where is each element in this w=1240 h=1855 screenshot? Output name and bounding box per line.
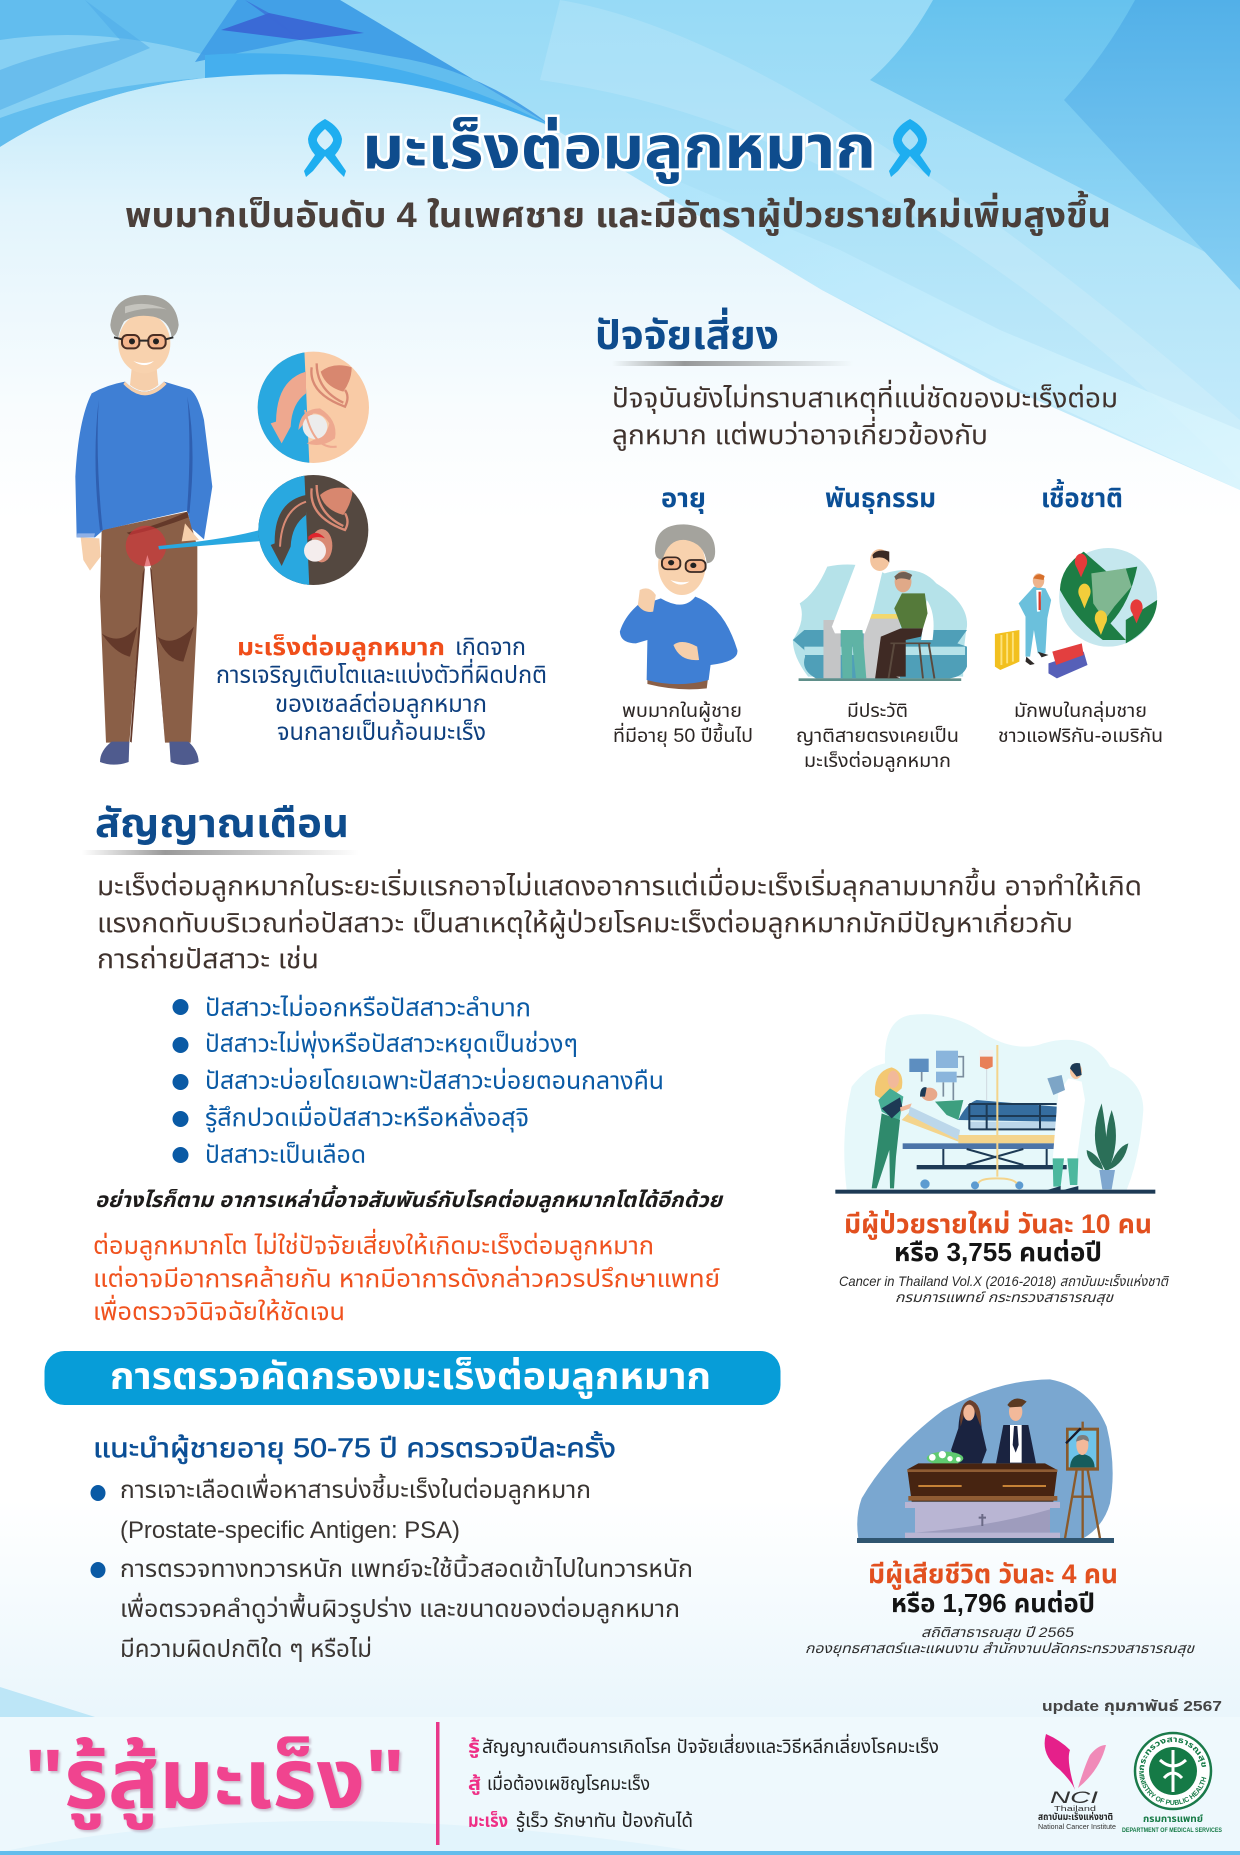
factor captions: มะเร็งต่อมลูกหมาก bbox=[804, 749, 951, 773]
illustration: man with anatomy circles bbox=[75, 295, 370, 765]
anatomy circle: cancer bbox=[257, 473, 370, 587]
footer divider bbox=[436, 1722, 440, 1845]
intro text: ปัจจุบันยังไม่ทราบสาเหตุที่แน่ชัดของมะเร็งต่อม bbox=[612, 379, 1118, 414]
panel: risk factors bbox=[595, 307, 1163, 773]
screening header pill: การตรวจคัดกรองมะเร็งต่อมลูกหมาก bbox=[110, 1356, 711, 1399]
pedestal bbox=[905, 1502, 1060, 1538]
main title: มะเร็งต่อมลูกหมาก bbox=[362, 114, 876, 184]
warning text: แต่อาจมีอาการคล้ายกัน หากมีอาการดังกล่าวควรปรึกษาแพทย์ bbox=[93, 1265, 720, 1293]
heading: risk factors: ปัจจัยเสี่ยง bbox=[595, 307, 779, 358]
symptom list bbox=[172, 994, 664, 1169]
icon: right blue ribbon bbox=[889, 119, 931, 177]
stat: new cases: กรมการแพทย์ กระทรวงสาธารณสุข bbox=[895, 1289, 1114, 1306]
factor headings: เชื้อชาติ bbox=[1041, 479, 1123, 513]
icon: globe and travel bbox=[995, 548, 1157, 678]
update date: update กุมภาพันธ์ 2567 bbox=[1042, 1698, 1222, 1715]
factor captions: พบมากในผู้ชาย bbox=[622, 699, 742, 723]
man bbox=[996, 1399, 1036, 1463]
stat: new cases: หรือ 3,755 คนต่อปี bbox=[894, 1237, 1102, 1267]
icon: older man bbox=[620, 524, 737, 689]
portrait bbox=[1065, 1422, 1100, 1538]
symptom list: ปัสสาวะบ่อยโดยเฉพาะปัสสาวะบ่อยตอนกลางคืน bbox=[205, 1067, 664, 1095]
screening list bbox=[90, 1473, 693, 1663]
symptom list: ปัสสาวะไม่พุ่งหรือปัสสาวะหยุดเป็นช่วงๆ bbox=[205, 1030, 578, 1059]
symptom list: ปัสสาวะเป็นเลือด bbox=[205, 1141, 366, 1169]
note: อย่างไรก็ตาม อาการเหล่านี้อาจสัมพันธ์กับโรคต่อมลูกหมากโตได้อีกด้วย bbox=[95, 1185, 724, 1213]
stat: deaths: สถิติสาธารณสุข ปี 2565 bbox=[921, 1624, 1074, 1641]
title bbox=[125, 114, 1111, 236]
factor headings: อายุ bbox=[661, 483, 706, 514]
logo: National Cancer Institute: NCI bbox=[1050, 1788, 1098, 1807]
doctor bbox=[1047, 1063, 1085, 1190]
plant bbox=[1087, 1103, 1128, 1189]
logo: Department of Medical Services: DEPARTMENT OF MEDICAL SERVICES bbox=[1122, 1827, 1223, 1834]
stat: deaths: มีผู้เสียชีวิต วันละ 4 คน bbox=[868, 1559, 1118, 1590]
factor headings bbox=[661, 479, 1123, 514]
IV and monitors bbox=[909, 1045, 998, 1177]
text: what is prostate cancer: จนกลายเป็นก้อนมะเร็ง bbox=[277, 718, 486, 746]
factor captions: ญาติสายตรงเคยเป็น bbox=[796, 725, 959, 747]
stat: deaths bbox=[805, 1559, 1195, 1657]
woman bbox=[951, 1400, 987, 1463]
logo: Department of Medical Services: กระทรวงสาธารณสุข bbox=[1140, 1737, 1206, 1770]
warning text: เพื่อตรวจวินิจฉัยให้ชัดเจน bbox=[93, 1294, 345, 1326]
footer slogan: "รู้สู้มะเร็ง" bbox=[24, 1732, 405, 1830]
footer text: รู้เร็ว รักษาทัน ป้องกันได้ bbox=[516, 1809, 693, 1833]
text: what is prostate cancer: เกิดจาก bbox=[455, 634, 526, 661]
icon: left blue ribbon bbox=[304, 119, 346, 177]
footer text: สู้ bbox=[468, 1773, 481, 1795]
factor captions bbox=[613, 699, 1163, 773]
text: what is prostate cancer: มะเร็งต่อมลูกหมาก bbox=[237, 633, 445, 662]
stat: new cases: มีผู้ป่วยรายใหม่ วันละ 10 คน bbox=[844, 1209, 1152, 1240]
symptom list: ปัสสาวะไม่ออกหรือปัสสาวะลำบาก bbox=[205, 994, 531, 1022]
casket bbox=[907, 1463, 1057, 1502]
body text: มะเร็งต่อมลูกหมากในระยะเริ่มแรกอาจไม่แสดงอาการแต่เมื่อมะเร็งเริ่มลุกลามมากขึ้น อาจทำให้เกิด bbox=[97, 867, 1142, 902]
body text bbox=[97, 867, 1142, 974]
logo: National Cancer Institute: สถาบันมะเร็งแห่งชาติ bbox=[1038, 1810, 1113, 1823]
screening list: (Prostate-specific Antigen: PSA) bbox=[120, 1517, 460, 1544]
factor headings: พันธุกรรม bbox=[825, 483, 936, 514]
screening text bbox=[90, 1431, 693, 1663]
flowers bbox=[927, 1451, 963, 1465]
logo: National Cancer Institute: National Cancer Institute bbox=[1038, 1824, 1116, 1831]
stat: deaths: กองยุทธศาสตร์และแผนงาน สำนักงานปลัดกระทรวงสาธารณสุข bbox=[805, 1640, 1195, 1657]
intro text: ลูกหมาก แต่พบว่าอาจเกี่ยวข้องกับ bbox=[612, 416, 988, 451]
footer text: รู้ bbox=[468, 1736, 480, 1758]
anatomy circle: normal bbox=[257, 350, 370, 463]
screening list: การเจาะเลือดเพื่อหาสารบ่งชี้มะเร็งในต่อมลูกหมาก bbox=[120, 1473, 591, 1505]
symptom list: รู้สึกปวดเมื่อปัสสาวะหรือหลั่งอสุจิ bbox=[205, 1100, 529, 1133]
footer text: เมื่อต้องเผชิญโรคมะเร็ง bbox=[487, 1770, 650, 1795]
footer text: มะเร็ง bbox=[468, 1809, 508, 1832]
logo: Department of Medical Services: กรมการแพทย์ bbox=[1143, 1814, 1203, 1825]
background blob bbox=[857, 1379, 1113, 1538]
factor captions: มีประวัติ bbox=[847, 701, 908, 722]
pointer and highlighted area bbox=[126, 526, 262, 566]
stat: new cases: Cancer in Thailand Vol.X (2016-2018) สถาบันมะเร็งแห่งชาติ bbox=[839, 1273, 1170, 1289]
man figure bbox=[75, 295, 212, 765]
body text: แรงกดทับบริเวณท่อปัสสาวะ เป็นสาเหตุให้ผู้ป่วยโรคมะเร็งต่อมลูกหมากมักมีปัญหาเกี่ยวกับ bbox=[97, 904, 1073, 939]
subtitle: พบมากเป็นอันดับ 4 ในเพศชาย และมีอัตราผู้ป่วยรายใหม่เพิ่มสูงขึ้น bbox=[125, 190, 1111, 236]
logo: Department of Medical Services bbox=[1122, 1732, 1223, 1834]
text: what is prostate cancer bbox=[216, 633, 547, 746]
logo: National Cancer Institute bbox=[1038, 1734, 1116, 1831]
bed bbox=[902, 1087, 1067, 1189]
floor bbox=[857, 1538, 1114, 1543]
screening header pill bbox=[44, 1351, 780, 1405]
factor captions: ที่มีอายุ 50 ปีขึ้นไป bbox=[613, 722, 753, 747]
screening list: เพื่อตรวจคลำดูว่าพื้นผิวรูปร่าง และขนาดของต่อมลูกหมาก bbox=[120, 1592, 680, 1624]
logo: National Cancer Institute: Thailand bbox=[1054, 1806, 1096, 1813]
footer text: สัญญาณเตือนการเกิดโรค ปัจจัยเสี่ยงและวิธีหลีกเลี่ยงโรคมะเร็ง bbox=[482, 1733, 939, 1758]
logo: Department of Medical Services: MINISTRY OF PUBLIC HEALTH bbox=[1138, 1771, 1206, 1805]
stat: new cases bbox=[839, 1209, 1170, 1306]
text: what is prostate cancer: ของเซลล์ต่อมลูกหมาก bbox=[275, 690, 487, 719]
illustration: hospital bed bbox=[835, 1014, 1155, 1194]
factor captions: ชาวแอฟริกัน-อเมริกัน bbox=[998, 726, 1163, 747]
floor bbox=[835, 1190, 1155, 1194]
illustration: funeral bbox=[857, 1379, 1114, 1543]
background blob bbox=[844, 1014, 1143, 1190]
screening list: การตรวจทางทวารหนัก แพทย์จะใช้นิ้วสอดเข้าไปในทวารหนัก bbox=[120, 1553, 693, 1583]
footer text bbox=[468, 1733, 939, 1833]
icon: doctor and patient bbox=[793, 549, 967, 681]
screening list: มีความผิดปกติใด ๆ หรือไม่ bbox=[120, 1635, 372, 1663]
warning text: ต่อมลูกหมากโต ไม่ใช่ปัจจัยเสี่ยงให้เกิดมะเร็งต่อมลูกหมาก bbox=[93, 1228, 654, 1261]
warning text bbox=[93, 1228, 720, 1326]
heading: warning signs: สัญญาณเตือน bbox=[95, 802, 349, 846]
text: what is prostate cancer: การเจริญเติบโตและแบ่งตัวที่ผิดปกติ bbox=[216, 658, 547, 689]
recommendation: แนะนำผู้ชายอายุ 50-75 ปี ควรตรวจปีละครั้ง bbox=[93, 1431, 616, 1464]
body text: การถ่ายปัสสาวะ เช่น bbox=[97, 944, 319, 974]
nurse bbox=[872, 1067, 912, 1188]
factor captions: มักพบในกลุ่มชาย bbox=[1014, 699, 1147, 722]
stat: deaths: หรือ 1,796 คนต่อปี bbox=[891, 1588, 1095, 1618]
panel: warning signs bbox=[82, 802, 1142, 1326]
intro text bbox=[612, 379, 1118, 451]
